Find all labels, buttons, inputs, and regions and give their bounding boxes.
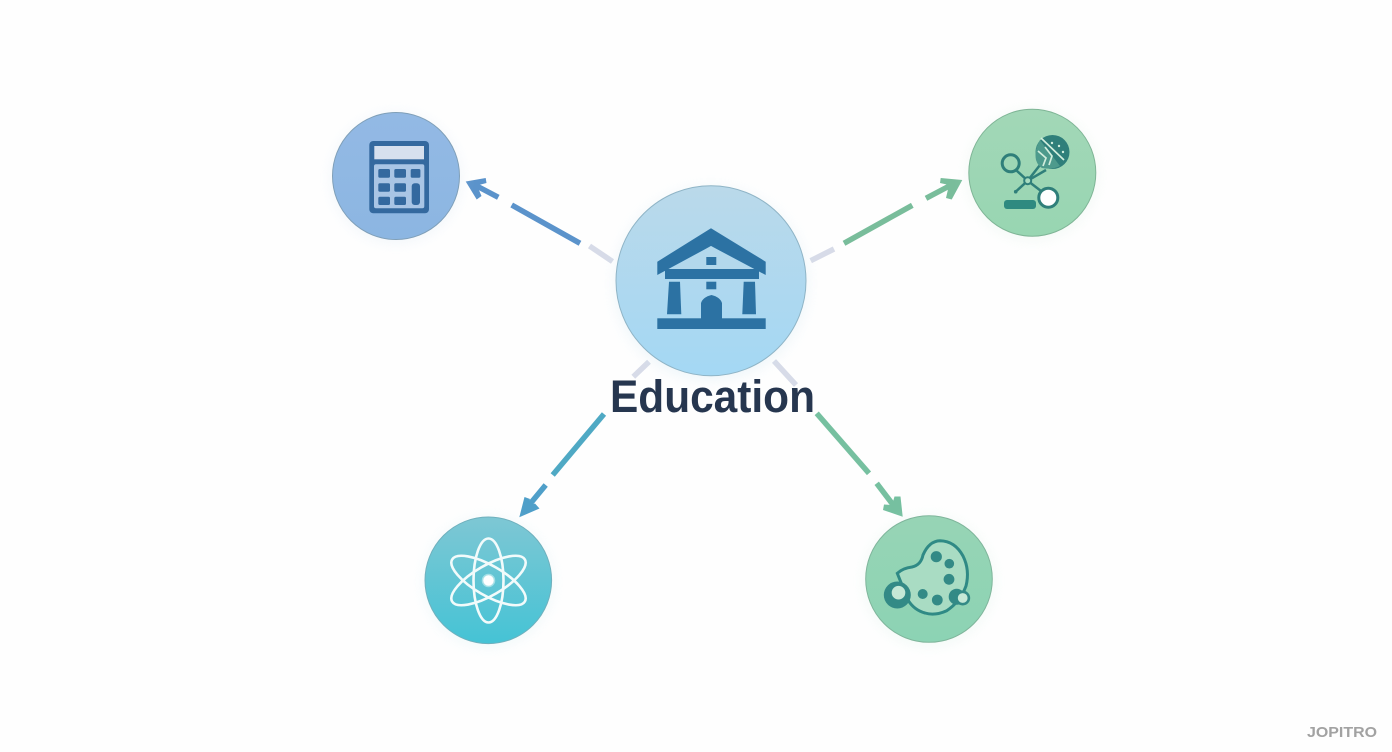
arrow: education to mathematics [466, 178, 612, 262]
node: mathematics [332, 112, 460, 242]
node: technology [968, 109, 1096, 239]
icon detail: balloon head [1036, 135, 1070, 169]
watermark: JOPITRO [1307, 724, 1377, 741]
icon: atom [445, 538, 532, 622]
node: arts [865, 516, 993, 645]
icon: calculator [369, 141, 429, 213]
node: science [424, 517, 552, 646]
title: Education: Education [610, 371, 815, 422]
icon: paint palette [884, 541, 969, 614]
icon: institution building [657, 228, 766, 329]
central node: education building [615, 186, 807, 380]
icon: molecule with balloon [1002, 135, 1070, 209]
arrow: education to technology [811, 178, 962, 261]
arrow: education to science [519, 362, 649, 517]
arrow: education to arts [774, 361, 903, 517]
